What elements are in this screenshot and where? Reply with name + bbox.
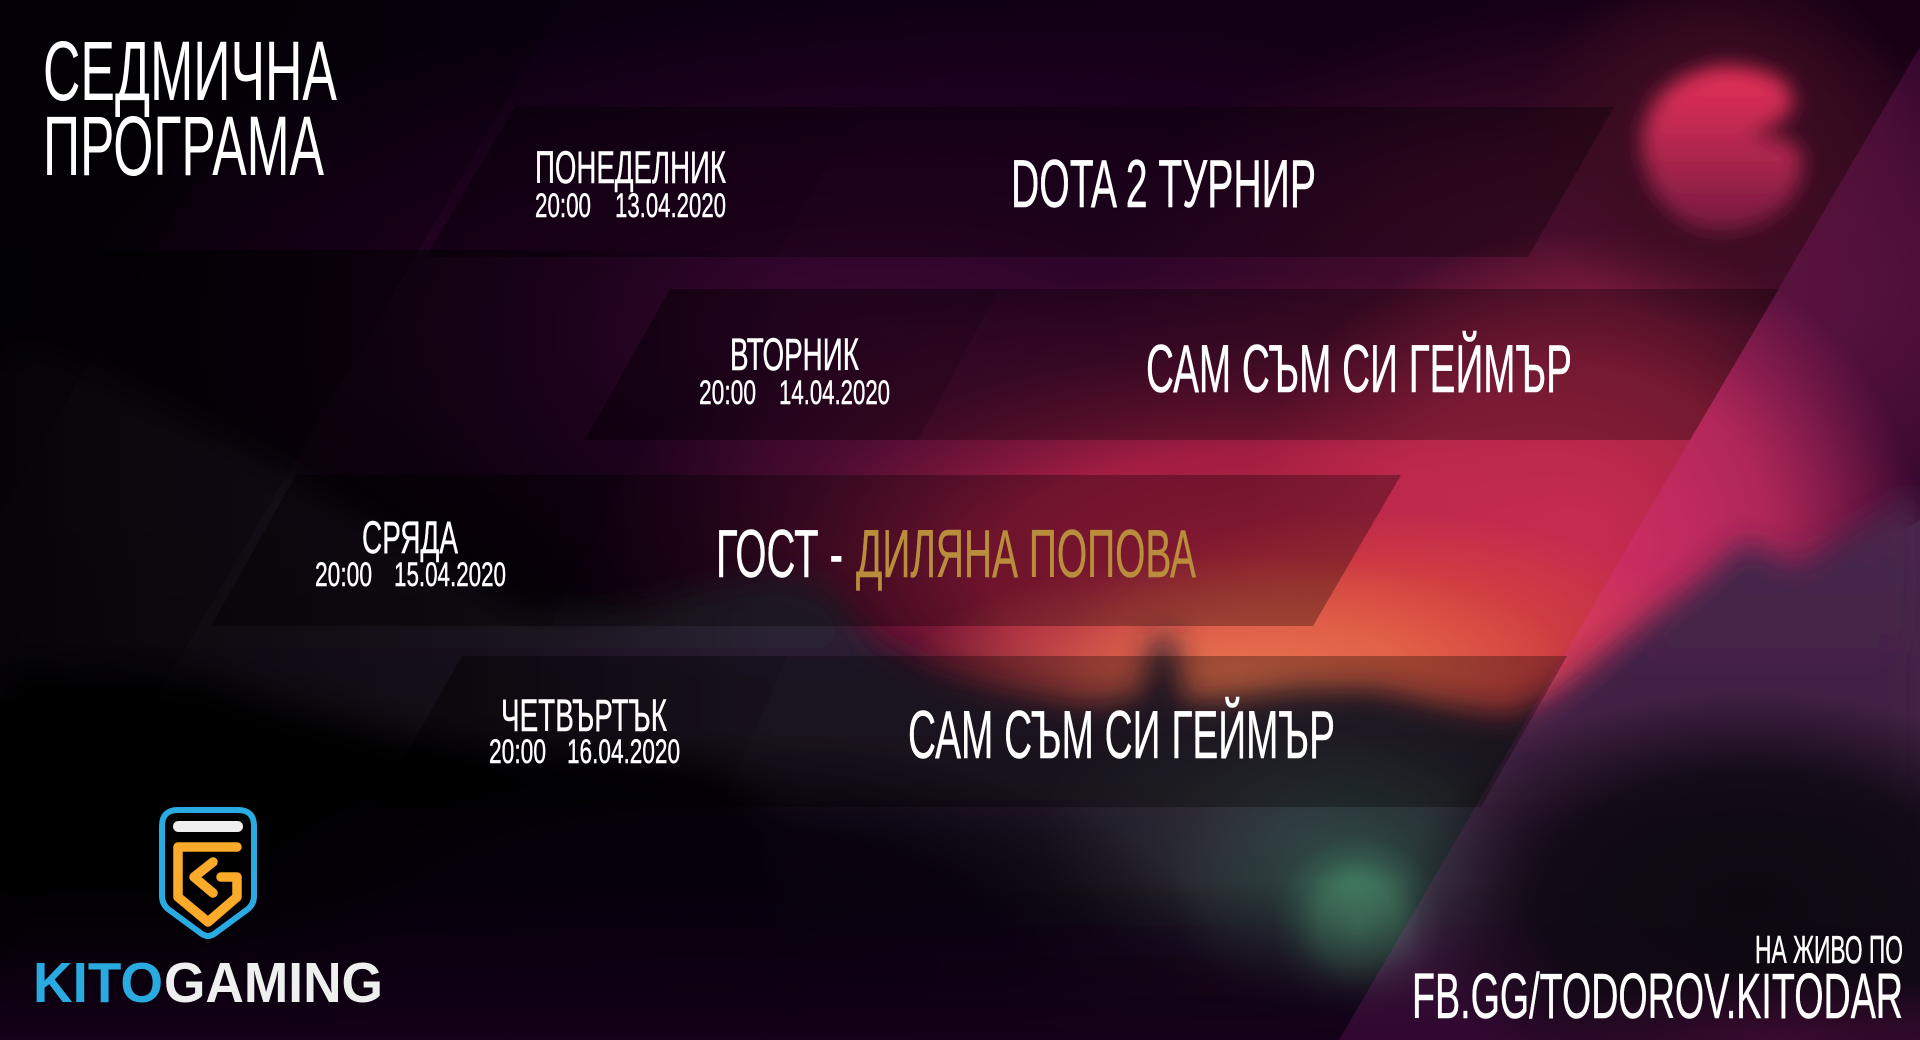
date: Monday: 20:00 bbox=[535, 187, 591, 225]
date: Monday bbox=[535, 187, 726, 225]
day: Tuesday: ВТОРНИК bbox=[730, 329, 859, 380]
panel: Tuesday row bbox=[585, 289, 1779, 440]
date: Wednesday: 15.04.2020 bbox=[394, 556, 506, 594]
date: Thursday bbox=[489, 733, 680, 771]
panel: Wednesday row bbox=[211, 475, 1401, 626]
date: Tuesday: 20:00 bbox=[699, 374, 756, 412]
date: Tuesday: 14.04.2020 bbox=[779, 374, 890, 412]
event: guest Dilyana Popova: ГОСТ - bbox=[716, 516, 843, 592]
title: СЕДМИЧНА bbox=[43, 24, 337, 118]
date: Thursday: 16.04.2020 bbox=[567, 733, 680, 771]
date: Wednesday bbox=[315, 556, 506, 594]
event: Dota 2 tournament: DOTA 2 ТУРНИР bbox=[1011, 146, 1316, 222]
event: guest Dilyana Popova: ДИЛЯНА ПОПОВА bbox=[856, 516, 1196, 592]
event: guest Dilyana Popova bbox=[716, 516, 1196, 592]
day: Thursday: ЧЕТВЪРТЪК bbox=[501, 690, 667, 741]
wordmark: KITO bbox=[33, 951, 163, 1015]
planet bbox=[1642, 66, 1802, 231]
date: Monday: 13.04.2020 bbox=[615, 187, 726, 225]
title: ПРОГРАМА bbox=[43, 99, 324, 193]
icon: shield bbox=[162, 810, 254, 936]
date: Thursday: 20:00 bbox=[489, 733, 546, 771]
wordmark bbox=[33, 951, 383, 1015]
panel: Monday row bbox=[426, 107, 1614, 257]
date: Tuesday bbox=[699, 374, 890, 412]
title bbox=[43, 24, 337, 193]
date: Wednesday: 20:00 bbox=[315, 556, 372, 594]
event: Sam sam si geymar: САМ СЪМ СИ ГЕЙМЪР bbox=[1146, 330, 1572, 407]
day: Monday: ПОНЕДЕЛНИК bbox=[535, 142, 726, 193]
call to action: live on bbox=[1412, 929, 1903, 1032]
event: Sam sam si geymar: САМ СЪМ СИ ГЕЙМЪР bbox=[908, 696, 1335, 773]
logo: Kito Gaming bbox=[33, 810, 383, 1015]
day: Wednesday: СРЯДА bbox=[362, 512, 458, 563]
panel: Thursday row bbox=[376, 656, 1567, 807]
wordmark: GAMING bbox=[164, 951, 383, 1015]
